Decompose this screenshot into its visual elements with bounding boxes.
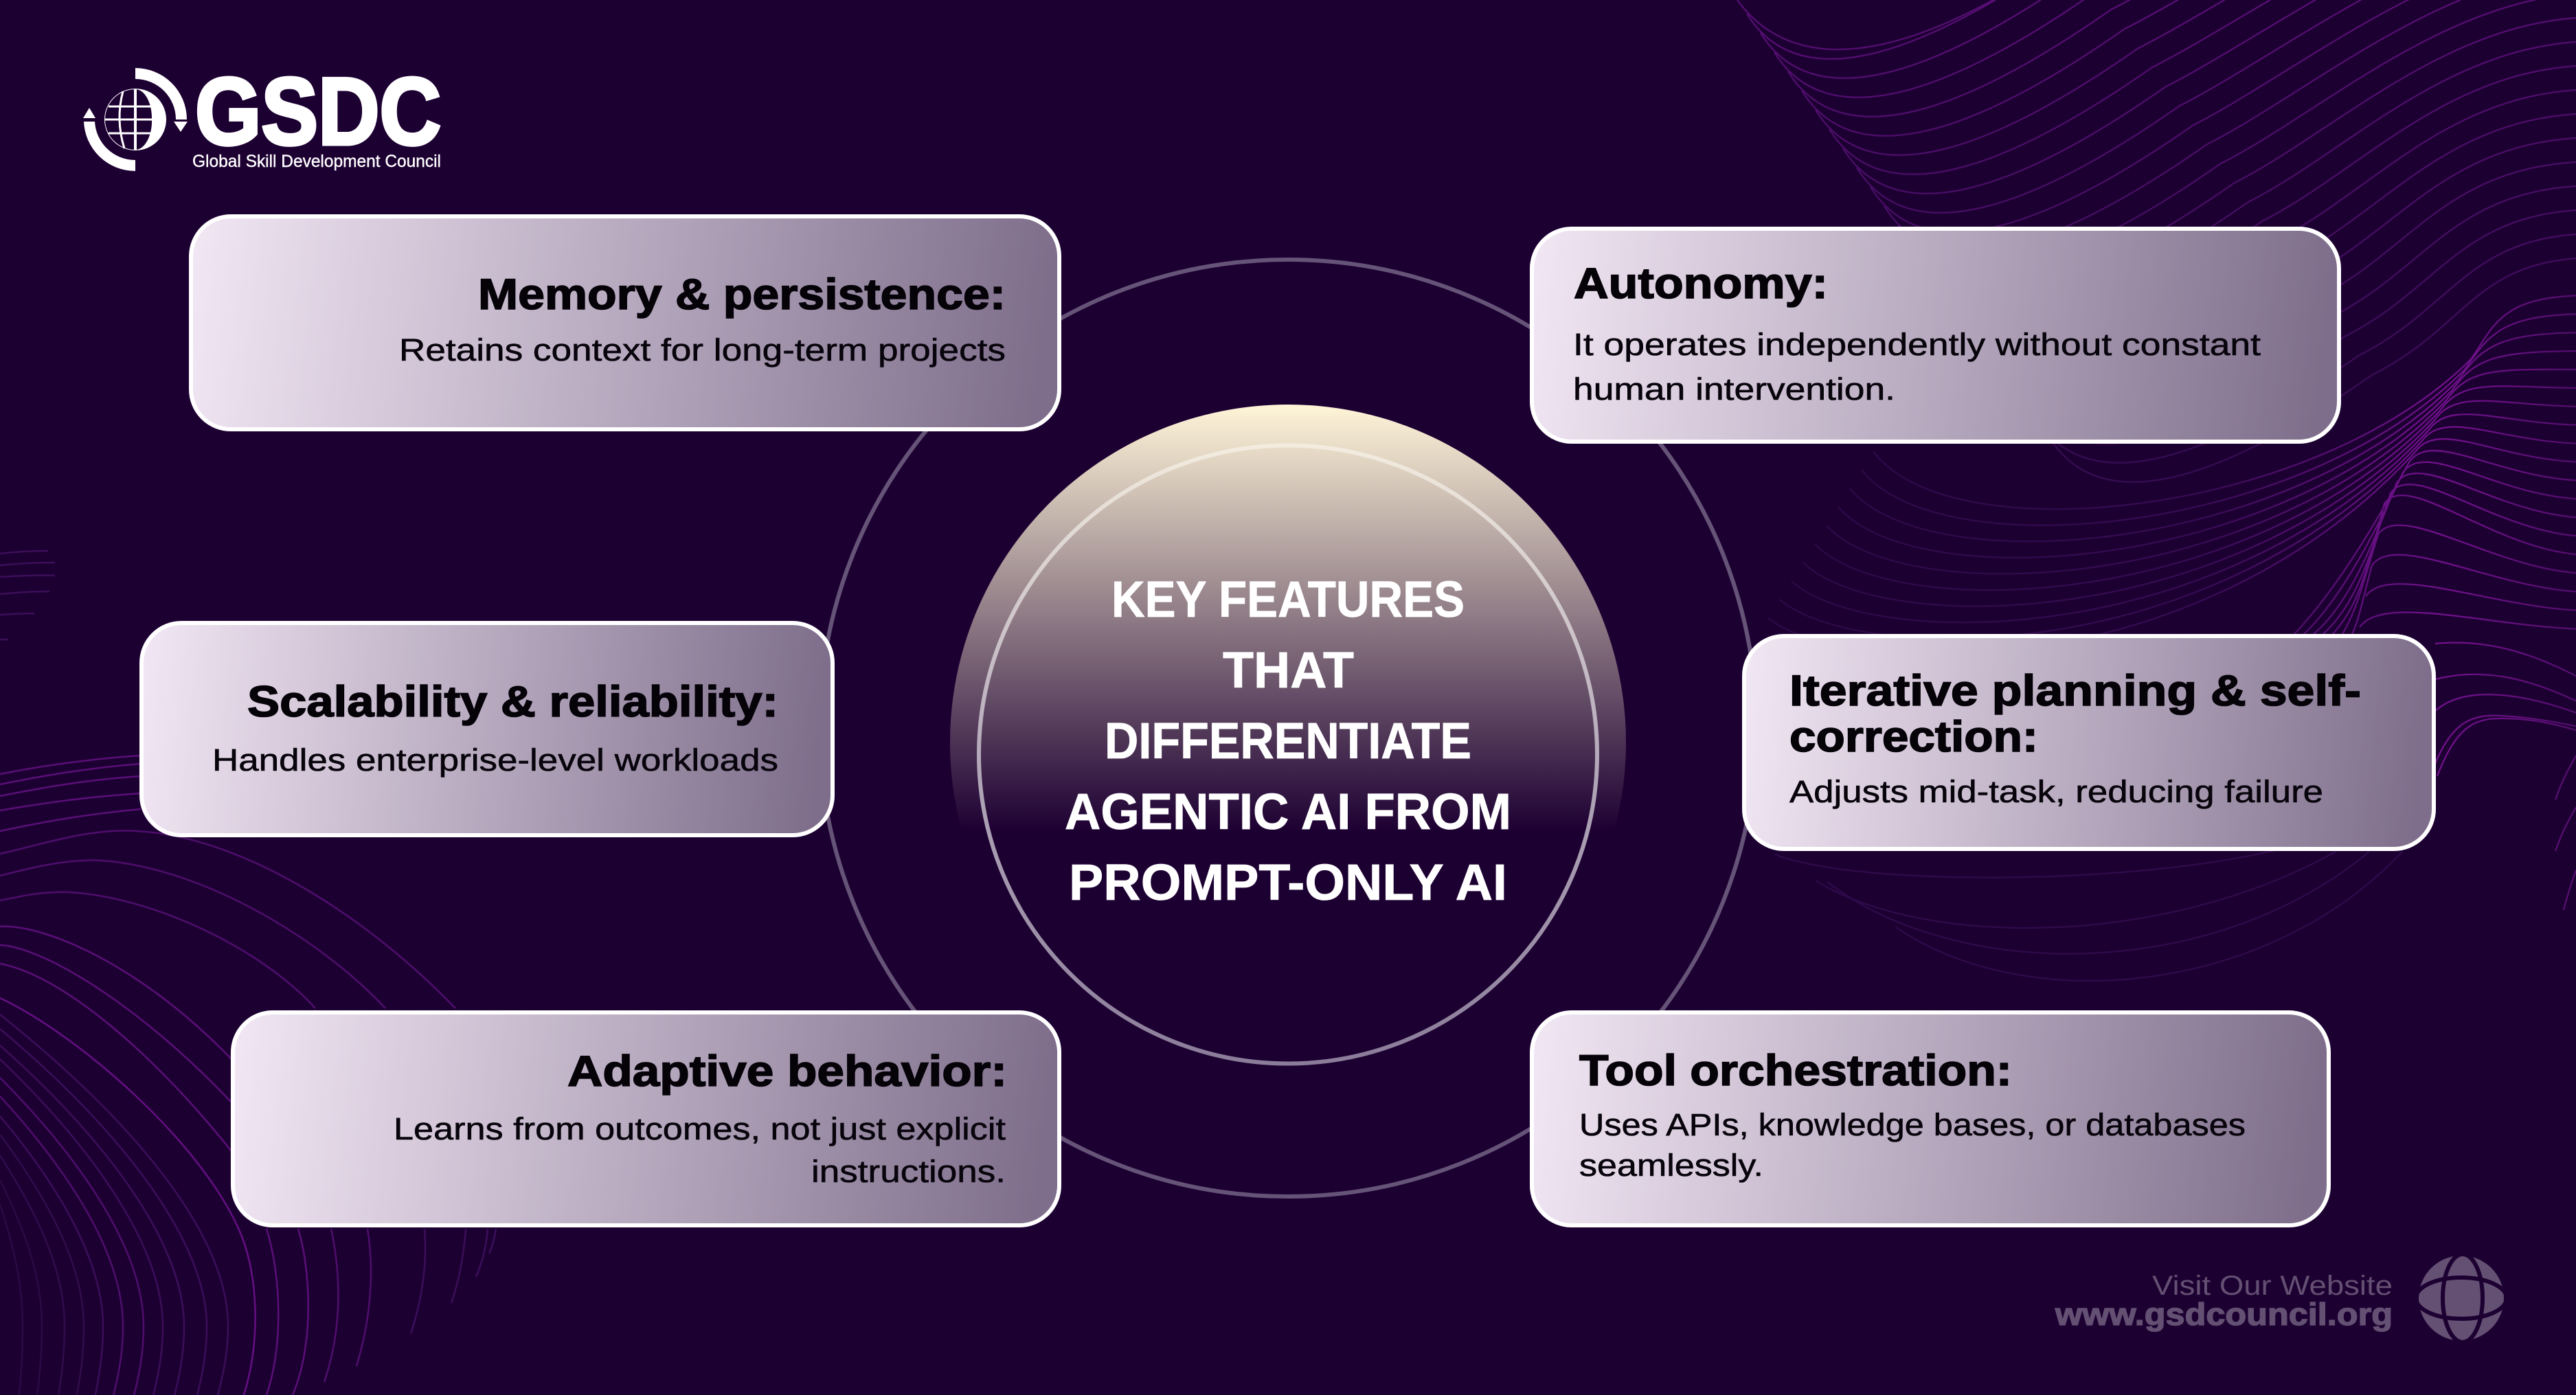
logo wordmark: GSDC bbox=[195, 58, 441, 165]
card: Tool orchestration bbox=[1532, 1012, 2329, 1225]
background wave lines: left bbox=[0, 551, 496, 1395]
description: Learns from outcomes, not just explicit bbox=[394, 1111, 1006, 1146]
card: Iterative planning & self-correction bbox=[1744, 636, 2434, 849]
description: seamlessly. bbox=[1579, 1148, 1763, 1183]
title: PROMPT-ONLY AI bbox=[1069, 854, 1507, 911]
description: Handles enterprise-level workloads bbox=[212, 742, 778, 778]
card: Scalability & reliability bbox=[142, 623, 833, 835]
footer label: Visit Our Website bbox=[2152, 1271, 2393, 1301]
heading: Tool orchestration: bbox=[1579, 1047, 2012, 1095]
description: Retains context for long-term projects bbox=[399, 332, 1006, 367]
title bbox=[1065, 571, 1511, 911]
footer url: www.gsdcouncil.org bbox=[2055, 1297, 2393, 1332]
heading: Adaptive behavior: bbox=[567, 1047, 1007, 1096]
background wave lines: middle right bbox=[1768, 295, 2576, 910]
outer ring bbox=[820, 260, 1756, 1196]
description bbox=[1573, 327, 2261, 407]
icon: globe with arrows bbox=[83, 68, 188, 171]
description: human intervention. bbox=[1573, 372, 1895, 407]
heading: Scalability & reliability: bbox=[247, 678, 778, 726]
website footer bbox=[2055, 1254, 2507, 1342]
central disc with title bbox=[950, 405, 1626, 1080]
description bbox=[394, 1111, 1006, 1189]
card: Memory & persistence bbox=[191, 216, 1059, 429]
description: Adjusts mid-task, reducing failure bbox=[1789, 774, 2323, 809]
logo: GSDC bbox=[83, 58, 441, 171]
logo tagline: Global Skill Development Council bbox=[192, 152, 441, 171]
heading: correction: bbox=[1789, 713, 2038, 761]
card: Autonomy bbox=[1532, 229, 2339, 442]
description: It operates independently without constant bbox=[1573, 327, 2261, 362]
heading bbox=[1789, 667, 2361, 761]
background wave lines: lower right bowls bbox=[1775, 849, 2402, 981]
title: AGENTIC AI FROM bbox=[1065, 783, 1511, 840]
title: DIFFERENTIATE bbox=[1105, 712, 1471, 769]
title: KEY FEATURES bbox=[1111, 571, 1465, 628]
description: instructions. bbox=[811, 1154, 1006, 1189]
description bbox=[1579, 1107, 2246, 1183]
icon: globe bbox=[2416, 1254, 2507, 1342]
heading: Iterative planning & self- bbox=[1789, 667, 2361, 715]
card: Adaptive behavior bbox=[233, 1012, 1059, 1225]
heading: Memory & persistence: bbox=[478, 271, 1006, 319]
background wave lines: top right bbox=[1737, 0, 2576, 482]
title: THAT bbox=[1223, 642, 1354, 699]
description: Uses APIs, knowledge bases, or databases bbox=[1579, 1107, 2246, 1142]
heading: Autonomy: bbox=[1574, 260, 1828, 308]
